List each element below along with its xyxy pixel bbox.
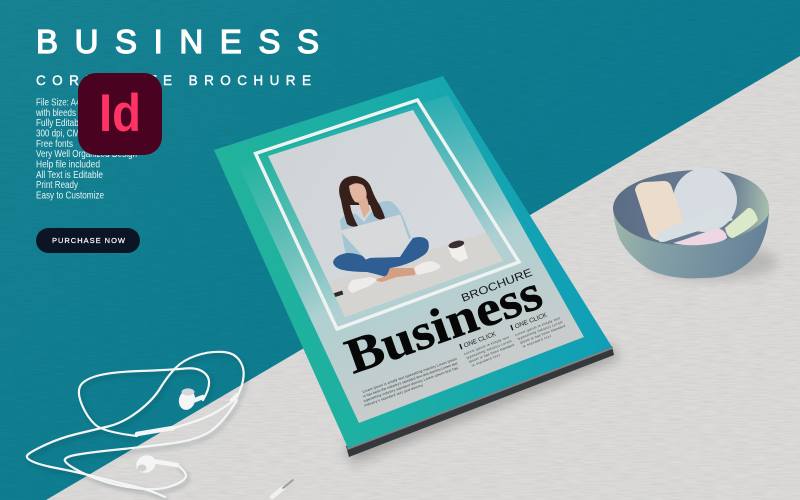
inline remote [137, 428, 173, 434]
upper earbud [177, 388, 203, 412]
brochure body text: typesetting industry standard dummy Lorem ipsum text has [363, 366, 459, 403]
woman's left shoe [348, 277, 377, 293]
cover pale panel [237, 95, 584, 423]
icon: InDesign logo [78, 73, 162, 155]
column: one click right: is standard text [522, 334, 551, 349]
cables [27, 352, 244, 497]
purchase button [36, 228, 140, 253]
woman's hair [339, 176, 385, 227]
column: one click left: is standard text [471, 353, 500, 368]
photo wall [268, 110, 501, 317]
feature list: Very Well Organized Design [36, 149, 137, 160]
dark object on floor [334, 290, 344, 297]
audio jack [272, 480, 293, 497]
laptop [341, 215, 409, 259]
feature list: with bleeds included [35, 108, 108, 119]
brochure shadow [345, 345, 620, 464]
column: one click right [510, 307, 567, 350]
brochure body text [359, 357, 462, 408]
brochure mockup [214, 76, 620, 464]
feature list: Print Ready [36, 180, 78, 191]
woman's jeans [333, 237, 429, 277]
woman's shirt [340, 201, 411, 256]
column: one click left: typesetting industry Lorem [466, 339, 512, 360]
bowl shadow [646, 244, 778, 280]
icon: InDesign logo: Id [99, 84, 141, 143]
feature list [35, 98, 137, 202]
photo of woman with laptop [268, 110, 503, 317]
brochure body text: industry's standard text and dummy [364, 383, 424, 408]
column: one click right: Lorem ipsum is simply text [514, 316, 561, 337]
white flat soap [657, 207, 733, 242]
earphones [27, 352, 293, 500]
feature list: Easy to Customize [36, 190, 104, 202]
large round soap [673, 168, 737, 232]
lower earbud [133, 452, 177, 476]
photo floor [329, 232, 502, 317]
bowl outer [613, 208, 769, 278]
title: BUSINESS [36, 23, 319, 60]
brochure heading: Business: Business [338, 263, 549, 384]
coffee cup [448, 239, 468, 262]
cable shadow [29, 355, 246, 500]
feature list: Help file included [36, 160, 100, 170]
column: one click right: ipsum is has been standard [519, 324, 566, 345]
column: one click right: ONE CLICK [514, 311, 549, 330]
cable splitter [232, 395, 237, 400]
woman's right shoe [415, 261, 441, 275]
purchase button: PURCHASE NOW [52, 236, 126, 245]
green soap [725, 208, 758, 238]
bowl inner [613, 170, 769, 245]
woman's ankles [373, 268, 415, 282]
subtitle: CORPORATE BROCHURE [36, 73, 311, 88]
bowl with soaps [613, 168, 778, 280]
column: one click left: ipsum is has been standard [468, 343, 515, 364]
column: one click right: typesetting industry Lorem [517, 320, 563, 341]
brochure heading: BROCHURE: BROCHURE [460, 267, 534, 305]
feature list: Free fonts [36, 139, 73, 150]
photo frame [256, 100, 519, 329]
brochure cover base [214, 76, 612, 448]
brochure page edge [346, 346, 614, 457]
brochure body text: Lorem ipsum is simply text typesetting industry Lorem ipsum [362, 357, 458, 394]
pink soap [673, 228, 727, 245]
feature list: File Size: A4 Format [36, 98, 108, 108]
woman's neck [358, 198, 370, 218]
feature list: 300 dpi, CMYK [36, 128, 90, 140]
column: one click left [459, 326, 516, 369]
column: one click left: Lorem ipsum is simply text [463, 335, 510, 356]
feature list: Fully Editable Layers [36, 118, 112, 129]
column: one click left: ONE CLICK [463, 330, 498, 349]
feature list: All Text is Editable [36, 170, 103, 181]
beige soap [635, 181, 682, 240]
brochure body text: is has been the industry's standard text and dummy Lorem text [363, 361, 458, 399]
woman's face [349, 183, 367, 203]
